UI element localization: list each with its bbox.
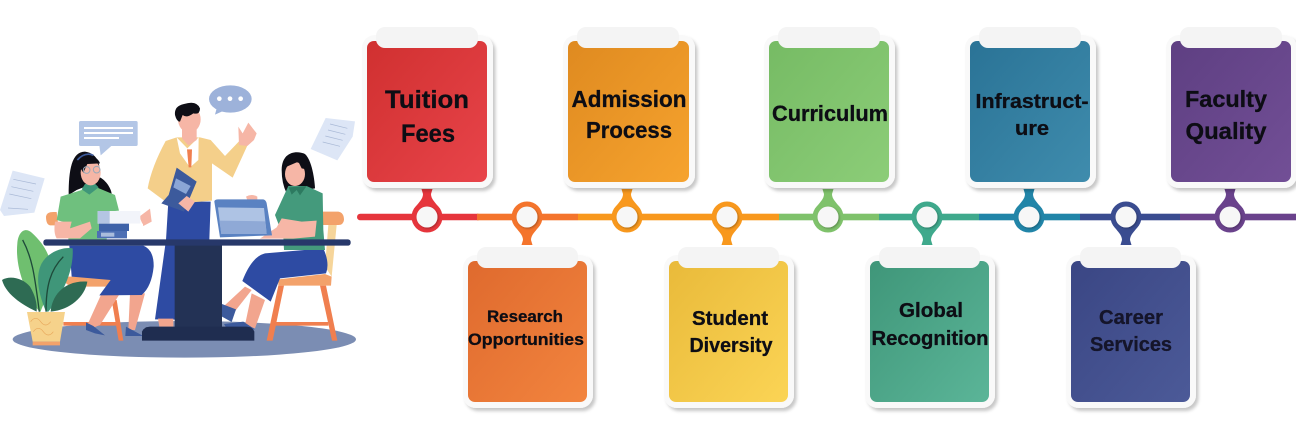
panel: Research Opportunities — [463, 247, 593, 408]
panel: Admission Process — [563, 27, 695, 188]
floor shadow ellipse — [13, 321, 356, 358]
woman right — [214, 152, 327, 329]
node 8 — [1110, 202, 1142, 245]
label: Career — [1099, 307, 1163, 329]
label: Process — [586, 117, 672, 143]
flying paper left — [0, 171, 45, 216]
label: Tuition — [385, 86, 469, 114]
panel: Tuition Fees — [362, 27, 493, 188]
potted plant — [2, 230, 87, 345]
panel: Faculty Quality — [1166, 27, 1296, 188]
panel: Student Diversity — [664, 247, 794, 408]
label: Global — [899, 300, 963, 322]
node 5 — [812, 189, 844, 232]
panel: Career Services — [1066, 247, 1196, 408]
label: ure — [1015, 118, 1049, 140]
node 7 — [1014, 189, 1044, 232]
table — [43, 239, 351, 341]
label: Fees — [401, 120, 455, 148]
label: Diversity — [690, 335, 773, 357]
node 9 — [1214, 189, 1246, 232]
chair right — [267, 212, 344, 341]
label: Faculty — [1185, 86, 1267, 112]
panel: Infrastructure — [965, 27, 1096, 188]
node 1 — [412, 189, 442, 232]
node 6 — [912, 202, 942, 245]
speech bubble with lines — [79, 121, 138, 155]
man standing — [148, 103, 257, 327]
node 3 — [612, 189, 642, 232]
label: Student — [692, 308, 768, 330]
label: Quality — [1186, 118, 1267, 144]
label: Opportunities — [468, 331, 584, 349]
node 4 — [712, 202, 742, 245]
timeline — [357, 189, 1296, 245]
chair left — [46, 212, 123, 341]
books stack — [97, 211, 143, 238]
panel: Global Recognition — [865, 247, 995, 408]
flying paper right — [311, 118, 355, 160]
node 2 — [512, 202, 542, 245]
label: Research — [487, 308, 563, 326]
label: Curriculum — [772, 101, 888, 126]
panel: Curriculum — [764, 27, 895, 188]
woman left — [54, 152, 154, 336]
label: Infrastruct- — [976, 91, 1088, 113]
timeline segments — [357, 214, 1296, 220]
label: Admission — [572, 86, 686, 112]
illustration: team meeting at a table — [0, 85, 356, 358]
label: Services — [1090, 334, 1172, 356]
label: Recognition — [872, 328, 988, 350]
speech bubble with dots — [209, 85, 252, 115]
